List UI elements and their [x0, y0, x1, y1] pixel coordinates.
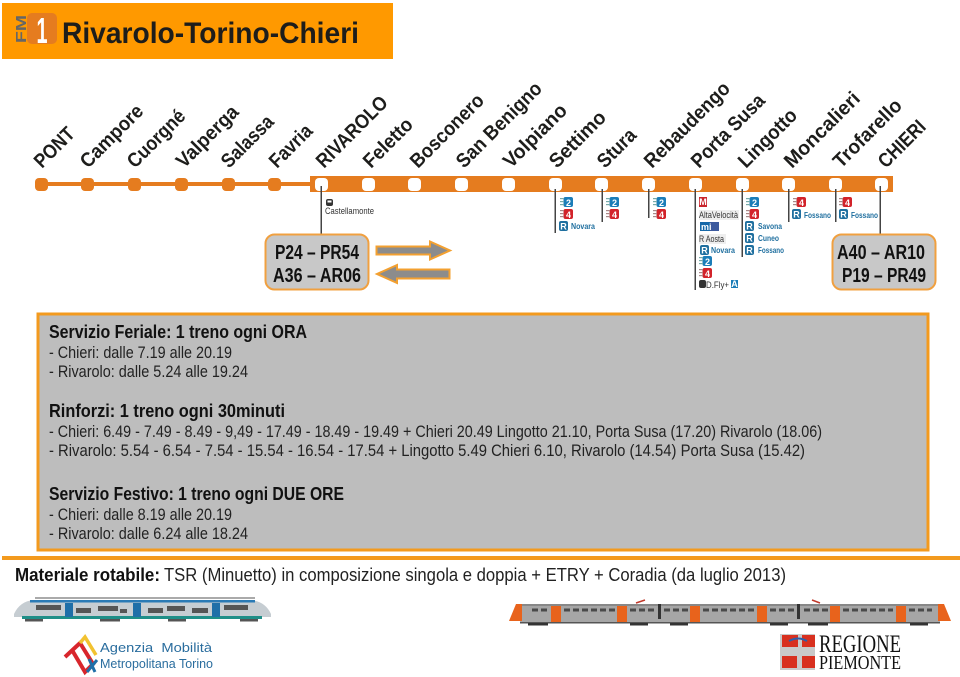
- station names: PONT: [30, 123, 79, 173]
- panel: timetable: [38, 314, 928, 550]
- title banner: [2, 3, 393, 59]
- connections: Settimo: Novara: [571, 221, 595, 231]
- station names: Rebaudengo: [640, 78, 735, 173]
- station names: Salassa: [217, 110, 279, 173]
- connections: Lingotto: [745, 197, 784, 256]
- reinforcement service: - Chieri: 6.49 - 7.49 - 8.49 - 9,49 - 17.49 - 18.49 - 19.49 + Chieri 20.49 Lingotto 21.10, Porta Susa (17.20) Rivarolo (18.06): [49, 423, 822, 441]
- station names: Volpiano: [499, 100, 572, 173]
- connections: Trofarello: [839, 197, 878, 220]
- logo: Regione Piemonte: PIEMONTE: [819, 652, 901, 674]
- station names: Campore: [76, 100, 148, 173]
- holiday service: - Rivarolo: dalle 6.24 alle 18.24: [49, 525, 248, 543]
- station names: CHIERI: [874, 116, 931, 173]
- station names: Porta Susa: [687, 89, 770, 173]
- connections: Porta Susa: M: [699, 197, 707, 207]
- connections: Porta Susa: mi: [701, 222, 712, 232]
- rolling stock text: TSR (Minuetto) in composizione singola e doppia + ETRY + Coradia (da luglio 2013): [164, 565, 786, 585]
- title text: Rivarolo-Torino-Chieri: [62, 17, 359, 50]
- station names: Favria: [265, 120, 318, 173]
- station names: Stura: [593, 124, 642, 173]
- reinforcement service: Rinforzi: 1 treno ogni 30minuti: [49, 401, 285, 421]
- arrow: towards Rivarolo: [377, 265, 450, 283]
- connections: Rivarolo: Castellamonte: [325, 206, 374, 216]
- station names: Valperga: [172, 101, 244, 173]
- holiday service: Servizio Festivo: 1 treno ogni DUE ORE: [49, 484, 344, 504]
- connections: Trofarello: Fossano: [851, 210, 878, 220]
- station names: San Benigno: [452, 78, 547, 173]
- rolling stock text: Materiale rotabile:: [15, 565, 160, 585]
- icon: FM1 line badge: 1: [36, 10, 48, 51]
- train: Coradia: [509, 600, 951, 626]
- connections: Porta Susa: D.Fly+: [706, 280, 729, 290]
- logo: Regione Piemonte: REGIONE: [819, 631, 901, 658]
- connections: Lingotto: Savona: [758, 221, 782, 231]
- station names: Lingotto: [734, 105, 802, 173]
- connections: Stura: [606, 197, 619, 220]
- weekday service: - Chieri: dalle 7.19 alle 20.19: [49, 344, 232, 362]
- station names: RIVAROLO: [312, 92, 393, 173]
- station names: [30, 78, 931, 173]
- logo: Regione Piemonte: [780, 631, 901, 674]
- connections: Rivarolo: [325, 199, 374, 216]
- platform box: Chieri: [832, 234, 936, 290]
- connections: Moncalieri: [792, 197, 831, 220]
- train: Minuetto: [14, 597, 271, 622]
- connections: Moncalieri: Fossano: [804, 210, 831, 220]
- reinforcement service: - Rivarolo: 5.54 - 6.54 - 7.54 - 15.54 - 16.54 - 17.54 + Lingotto 5.49 Chieri 6.10, Rivarolo (14.54) Porta Susa (15.42): [49, 442, 805, 460]
- icon: FM1 line badge: FM: [13, 15, 30, 43]
- station names: Feletto: [359, 114, 418, 173]
- connections: Porta Susa: R Aosta: [699, 234, 724, 244]
- logo: Agenzia Mobilità: Agenzia Mobilità: [100, 640, 213, 655]
- connections: Porta Susa: A: [731, 279, 738, 289]
- station names: Settimo: [545, 107, 611, 173]
- logo: Agenzia Mobilità: [65, 637, 213, 672]
- connections: Rebaudengo: [653, 197, 666, 220]
- platform box: Rivarolo: P24 – PR54: [275, 242, 360, 264]
- line diagram: [35, 176, 893, 290]
- platform box: Chieri: A40 – AR10: [837, 242, 925, 264]
- station names: Bosconero: [406, 90, 489, 173]
- platform box: Chieri: P19 – PR49: [842, 265, 926, 287]
- reinforcement service: [49, 401, 822, 460]
- connections: Porta Susa: [699, 197, 739, 290]
- station names: Cuorgné: [123, 105, 190, 173]
- connections: Porta Susa: Novara: [711, 245, 735, 255]
- weekday service: Servizio Feriale: 1 treno ogni ORA: [49, 322, 307, 342]
- holiday service: - Chieri: dalle 8.19 alle 20.19: [49, 506, 232, 524]
- connections: Lingotto: Fossano: [758, 245, 784, 255]
- station names: Trofarello: [829, 95, 907, 173]
- connections: Settimo: [559, 197, 595, 232]
- weekday service: - Rivarolo: dalle 5.24 alle 19.24: [49, 363, 248, 381]
- holiday service: [49, 484, 344, 543]
- icon: FM1 line badge: [13, 10, 57, 51]
- connections: Lingotto: Cuneo: [758, 233, 779, 243]
- platform box: Rivarolo: A36 – AR06: [273, 265, 361, 287]
- weekday service: [49, 322, 307, 381]
- platform box: Rivarolo: [266, 234, 368, 290]
- logo: Agenzia Mobilità: Metropolitana Torino: [100, 656, 213, 671]
- arrow: towards Chieri: [376, 242, 450, 260]
- station names: Moncalieri: [780, 88, 865, 173]
- connections: Porta Susa: AltaVelocità: [699, 210, 738, 220]
